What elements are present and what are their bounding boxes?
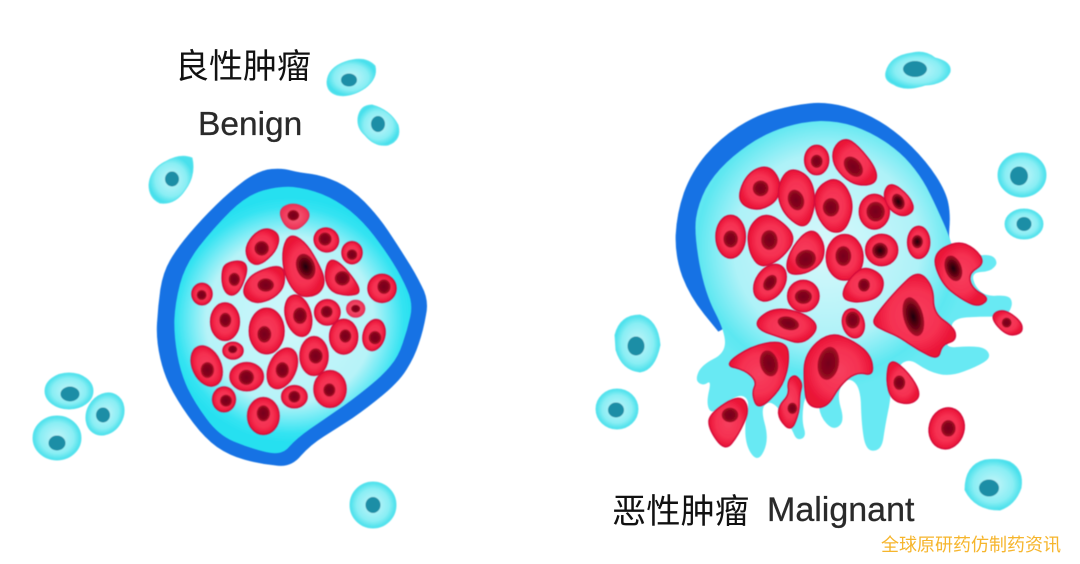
normal cell right 2 [1005, 209, 1043, 239]
normal cell top right [886, 52, 950, 88]
benign inner cytoplasm [174, 187, 411, 453]
normal cell lower left 2 [78, 386, 132, 442]
normal cell lower left 1 [45, 373, 93, 409]
normal cell lower right [965, 459, 1022, 510]
malignant tumor [676, 103, 1022, 458]
normal cell left of malignant 1 [615, 315, 660, 372]
malignant cytoplasm with invasive tendrils [695, 121, 1012, 458]
normal cell right 1 [998, 153, 1046, 197]
title: malignant Chinese: 恶性肿瘤 [612, 493, 749, 531]
title: benign English: Benign [198, 106, 302, 143]
benign tumor [157, 169, 427, 466]
normal cell left of benign [149, 156, 193, 203]
watermark: 全球原研药仿制药资讯 [881, 535, 1061, 555]
normal cell top 1 [327, 59, 376, 96]
normal cell top 2 [358, 105, 399, 145]
normal cells [33, 52, 1046, 528]
normal cell left of malignant 2 [596, 389, 638, 429]
normal cell below benign [350, 482, 396, 528]
malignant blue membrane crescent [676, 103, 950, 332]
title: malignant English: Malignant [767, 491, 915, 529]
title: benign Chinese: 良性肿瘤 [175, 48, 311, 86]
malignant tumor cells [709, 140, 1022, 453]
normal cell lower left 3 [33, 416, 81, 460]
benign outer membrane [157, 169, 427, 466]
benign tumor cells [185, 204, 396, 434]
